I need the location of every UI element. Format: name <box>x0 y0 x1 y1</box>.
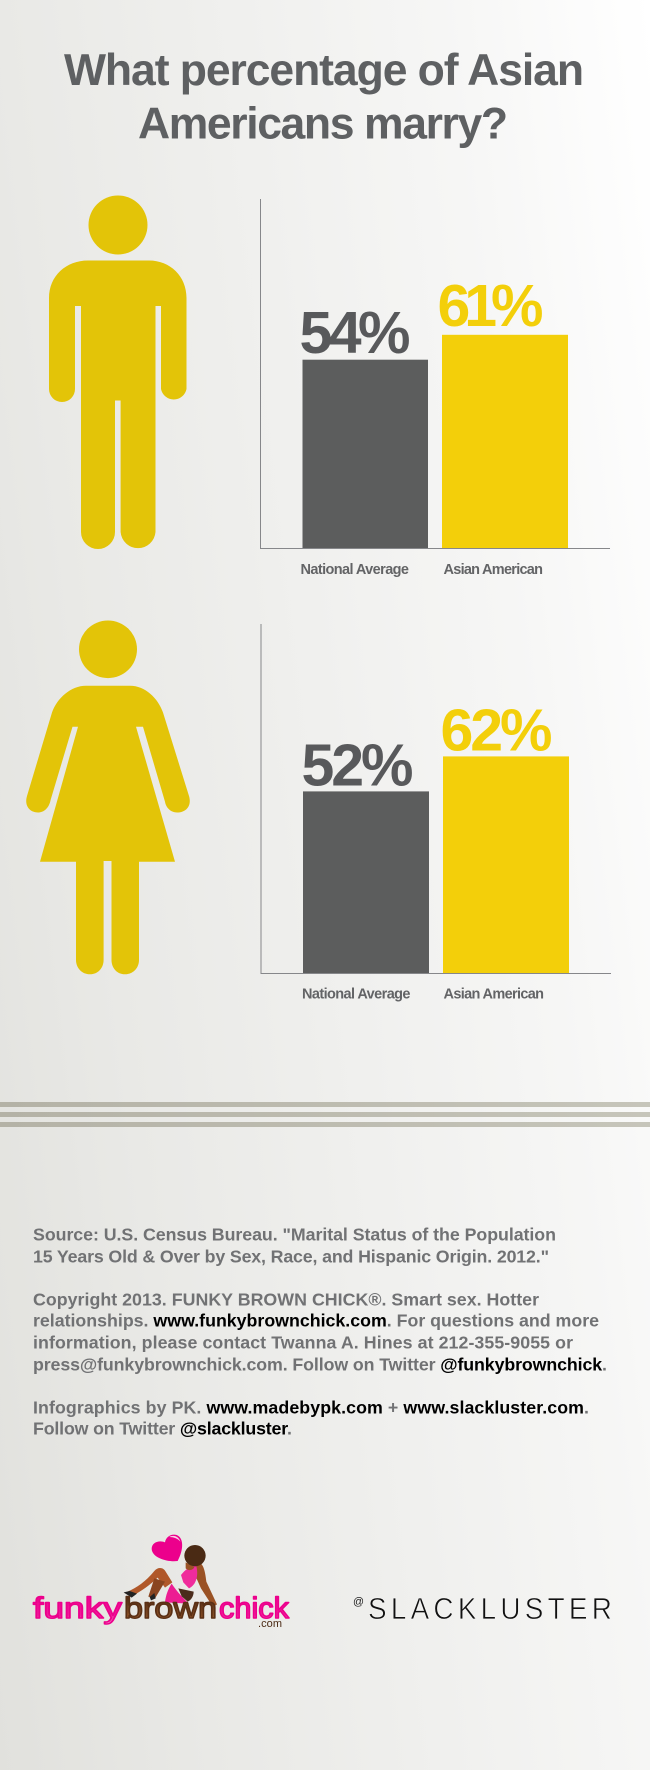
wordmark: funky: funky <box>33 1592 122 1625</box>
bar: men national average <box>302 360 428 548</box>
label: national average: National Average <box>300 562 409 578</box>
icon: male figure <box>49 196 186 549</box>
text block: credits <box>33 1397 589 1439</box>
label: national average: National Average <box>302 986 410 1002</box>
text block: copyright: relationships. www.funkybrownchick.com. For questions and more <box>33 1311 599 1331</box>
text block: credits: Follow on Twitter @slackluster. <box>33 1419 292 1439</box>
wordmark suffix: .com <box>258 1618 282 1630</box>
bar: women Asian American <box>443 756 569 973</box>
logo: funkybrownchick <box>33 1535 290 1630</box>
logo: slackluster: SLACKLUSTER <box>368 1592 612 1626</box>
text block: copyright: Copyright 2013. FUNKY BROWN CHICK®. Smart sex. Hotter <box>33 1289 539 1309</box>
text block: copyright <box>33 1289 607 1374</box>
wordmark: chick: chick <box>219 1592 290 1625</box>
bar chart: women <box>261 624 611 1002</box>
text block: copyright: information, please contact Twanna A. Hines at 212-355-9055 or <box>33 1333 573 1353</box>
logo: slackluster: @ <box>353 1596 364 1608</box>
title: Americans marry? <box>138 100 508 148</box>
value: 62%: 62% <box>440 698 552 764</box>
icon: female figure <box>26 620 190 974</box>
text block: credits: Infographics by PK. www.madebypk.com + www.slackluster.com. <box>33 1397 589 1417</box>
title <box>64 46 584 148</box>
value: 54%: 54% <box>300 300 410 366</box>
text block: source: 15 Years Old & Over by Sex, Race, and Hispanic Origin. 2012." <box>33 1247 549 1267</box>
icon: seated woman <box>124 1545 217 1607</box>
wordmark: brown: brown <box>124 1592 217 1625</box>
label: Asian American: Asian American <box>444 986 544 1002</box>
bar: men Asian American <box>442 335 568 548</box>
value: 61%: 61% <box>438 273 544 339</box>
title: What percentage of Asian <box>64 46 584 95</box>
label: Asian American: Asian American <box>444 562 543 578</box>
icon: pink heart <box>152 1535 182 1561</box>
divider stripes <box>0 1102 650 1127</box>
bar: women national average <box>303 791 429 973</box>
text block: source <box>33 1225 556 1267</box>
bar chart: men <box>260 199 610 578</box>
text block: source: Source: U.S. Census Bureau. "Marital Status of the Population <box>33 1225 556 1245</box>
text block: copyright: press@funkybrownchick.com. Follow on Twitter @funkybrownchick. <box>33 1354 607 1374</box>
value: 52%: 52% <box>302 733 414 799</box>
